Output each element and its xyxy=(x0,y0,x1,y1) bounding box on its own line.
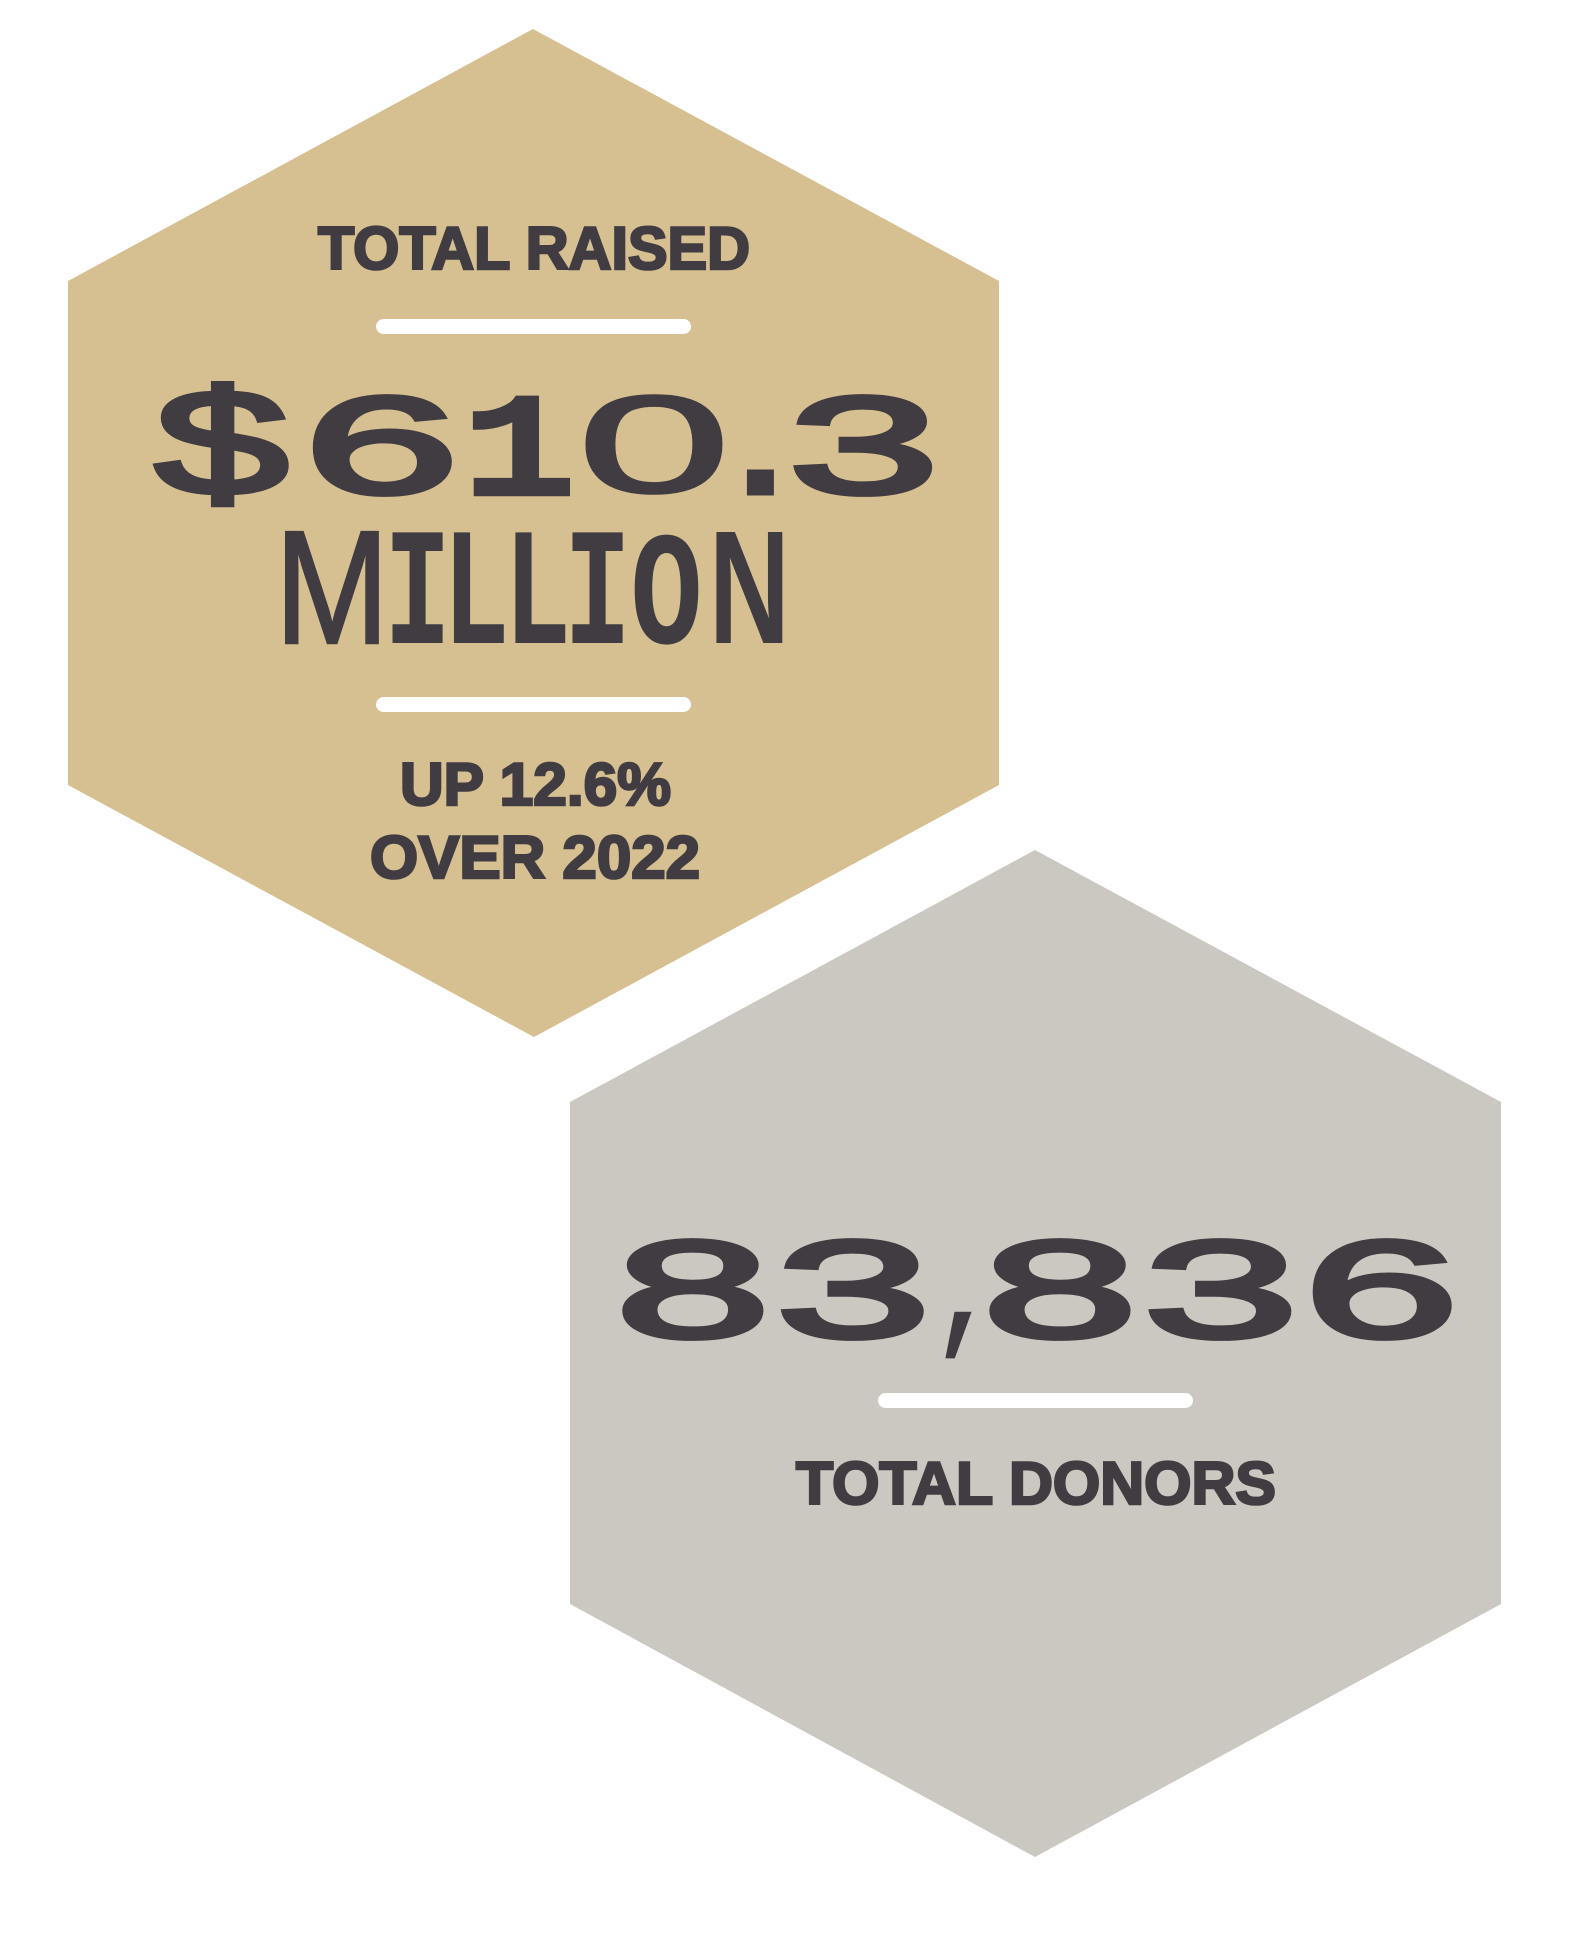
divider: lower xyxy=(376,697,691,712)
figure: $610.3: . xyxy=(706,373,815,536)
heading: total raised: TOTAL RAISED xyxy=(318,215,750,282)
figure unit: million xyxy=(275,496,790,694)
change note: up 12.6% over 2022: OVER 2022 xyxy=(370,824,700,891)
hexagon background: grey xyxy=(570,850,1501,1857)
change note: up 12.6% over 2022: UP 12.6% xyxy=(400,751,671,818)
divider xyxy=(878,1393,1193,1408)
panel: total donors hexagon xyxy=(570,850,1501,1857)
figure: $610.3 xyxy=(150,367,945,540)
figure: $610.3: 0 xyxy=(578,368,730,522)
figure: $610.3: 1 xyxy=(465,377,573,535)
change note: up 12.6% over 2022 xyxy=(370,751,700,891)
hexagon background: gold xyxy=(68,29,999,1037)
heading: total donors: TOTAL DONORS xyxy=(796,1450,1276,1517)
figure: 83,836 xyxy=(609,1217,1465,1380)
figure: 83,836: 83 xyxy=(609,1217,937,1380)
figure unit: million: O xyxy=(630,508,702,692)
divider: upper xyxy=(376,319,691,334)
figure unit: million: ILLI xyxy=(384,503,631,694)
figure unit: million: M xyxy=(275,496,389,677)
figure: $610.3: $ xyxy=(150,367,294,540)
figure: $610.3: 3 xyxy=(781,374,945,537)
figure: 83,836: , xyxy=(935,1224,995,1372)
figure: $610.3: 6 xyxy=(297,373,465,536)
figure: 83,836: 836 xyxy=(976,1217,1465,1380)
panel: total raised hexagon xyxy=(68,29,999,1037)
figure unit: million: N xyxy=(709,498,790,678)
